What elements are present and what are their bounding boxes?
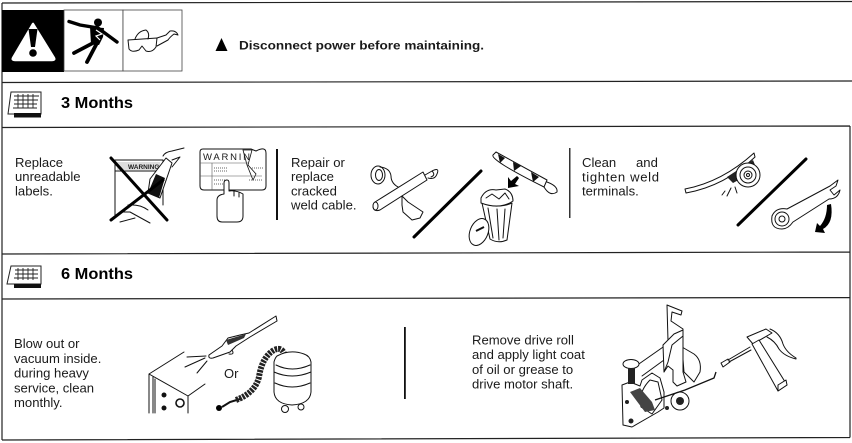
icon: calendar 6 months — [7, 266, 41, 288]
illustration: crossed-out painting over label — [111, 148, 184, 223]
text: repair cable: replace — [291, 169, 334, 184]
marker: warning triangle bullet — [216, 38, 228, 51]
text: remove drive roll: drive motor shaft. — [472, 377, 573, 392]
illustration: wire brush on terminal — [685, 153, 760, 196]
divider — [569, 148, 570, 218]
illustration: replacement label with pointing hand — [200, 149, 266, 222]
illustration: drive roll assembly — [622, 305, 716, 427]
illustration: crossed-out painting over label: WARNING — [128, 164, 159, 171]
text: remove drive roll: Remove drive roll — [472, 332, 574, 348]
text: repair cable: weld cable. — [290, 198, 357, 213]
illustration: replacement label with pointing hand: WARNIN — [203, 152, 250, 163]
text: clean terminals: tighten weld — [582, 170, 659, 184]
text: replace labels: labels. — [15, 183, 53, 198]
text: blow out or vacuum: Blow out or — [14, 336, 80, 351]
text: blow out or vacuum: during heavy — [14, 366, 89, 381]
illustration: wrench tightening terminal — [772, 180, 840, 233]
icon: electric shock figure — [64, 10, 123, 71]
icon: calendar 3 months — [8, 92, 41, 118]
text: remove drive roll: and apply light coat — [472, 347, 585, 362]
icon: safety warning triangle — [2, 10, 64, 72]
text: disconnect power warning: Disconnect power before maintaining. — [239, 38, 484, 52]
text: blow out or vacuum: vacuum inside. — [14, 351, 101, 366]
heading: 3 Months: 3 Months — [61, 95, 133, 112]
heading: 6 Months: 6 Months — [61, 266, 133, 283]
text: clean terminals — [582, 155, 659, 198]
divider — [404, 327, 406, 399]
text: clean terminals: Clean — [582, 155, 616, 170]
text: repair cable: cracked — [291, 183, 337, 198]
text: Or: Or — [224, 366, 239, 381]
slash divider — [738, 159, 806, 225]
text: clean terminals: and — [636, 155, 658, 170]
slash divider — [414, 171, 481, 237]
divider — [276, 149, 278, 220]
text: replace labels: Replace — [15, 155, 63, 170]
text: blow out or vacuum: monthly. — [14, 395, 63, 410]
illustration: taping a cracked cable — [371, 166, 438, 220]
text: replace labels: unreadable — [15, 169, 81, 184]
illustration: welder cabinet with blow gun — [149, 316, 277, 413]
illustration: vacuum with hose — [216, 349, 311, 412]
text: blow out or vacuum: service, clean — [14, 380, 94, 395]
text: remove drive roll: of oil or grease to — [472, 362, 573, 377]
text: clean terminals: terminals. — [582, 184, 639, 198]
text: repair cable: Repair or — [291, 155, 345, 170]
illustration: cable into trash can — [465, 152, 557, 248]
icon: safety glasses — [123, 10, 182, 71]
illustration: grease gun — [721, 329, 796, 391]
